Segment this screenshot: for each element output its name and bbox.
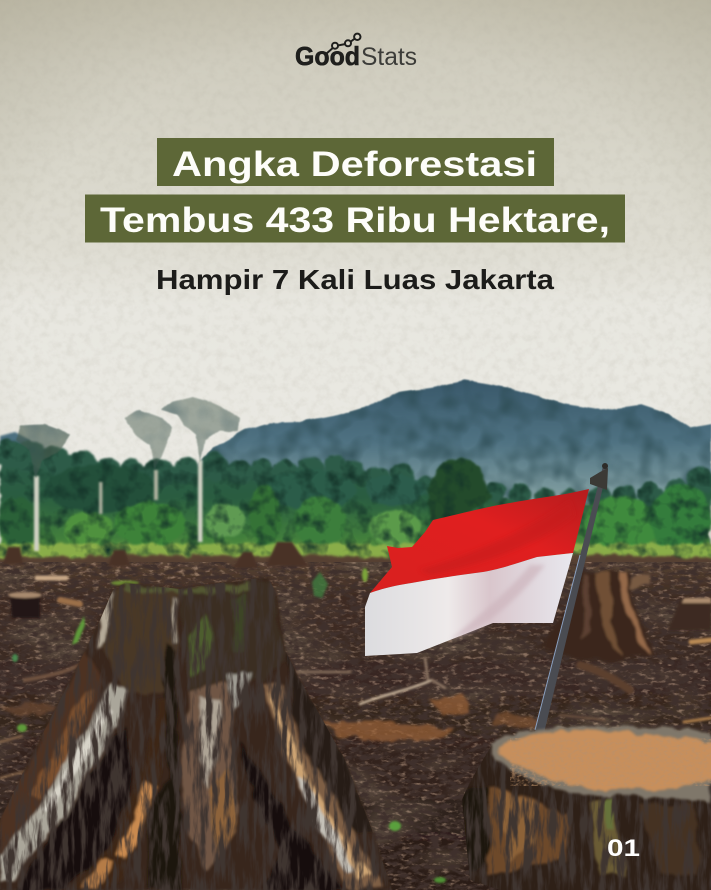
photo: mountain (165, 380, 711, 505)
logo chart line icon (326, 34, 360, 54)
distant stumps (3, 542, 308, 568)
right outer root (285, 650, 372, 835)
moss (190, 610, 215, 675)
photo: far-right stump (668, 598, 711, 630)
logo: GoodStats: Stats (361, 43, 417, 71)
small stump left (8, 592, 42, 618)
orange root (70, 700, 166, 890)
sawdust top (498, 730, 711, 790)
photo: cleared ground (0, 542, 711, 890)
photo: Indonesian flag (365, 489, 589, 656)
white stripe (365, 553, 573, 656)
paper background (0, 0, 711, 560)
white fold shading (450, 565, 545, 640)
sticks and wood debris (0, 578, 711, 778)
photo: large foreground stump (0, 577, 400, 890)
upper body tones (100, 590, 180, 695)
page number: 01 (607, 835, 640, 862)
seedlings (12, 568, 446, 883)
heading line 2 (85, 194, 625, 242)
right light root (262, 682, 382, 890)
subtitle: Hampir 7 Kali Luas Jakarta (156, 264, 555, 295)
logo: GoodStats: Good (295, 41, 360, 71)
heading line 2: Tembus 433 Ribu Hektare, (100, 201, 610, 240)
dark foreground tree (428, 458, 490, 520)
photo: cut stump with sawdust (455, 726, 711, 890)
tall tree trunks (34, 460, 202, 551)
bright undergrowth band (0, 544, 711, 564)
dark cavities (15, 725, 132, 890)
red stripe (370, 489, 589, 593)
heading line 1: Angka Deforestasi (172, 145, 537, 184)
sawdust texture (510, 738, 711, 786)
orange clay patches (0, 695, 545, 742)
photo: back stump (540, 572, 656, 660)
photo: forest (0, 397, 711, 564)
red fold shading (420, 500, 575, 575)
logo: GoodStats (295, 34, 417, 71)
central panel (182, 680, 240, 870)
photo: distant hill left (0, 432, 30, 460)
stump rim (492, 726, 711, 802)
photo: flag pole (535, 463, 608, 733)
heading line 1 (157, 138, 554, 186)
tall tree canopies (16, 397, 240, 478)
left outer root (0, 650, 105, 860)
light bark strip (0, 682, 127, 882)
